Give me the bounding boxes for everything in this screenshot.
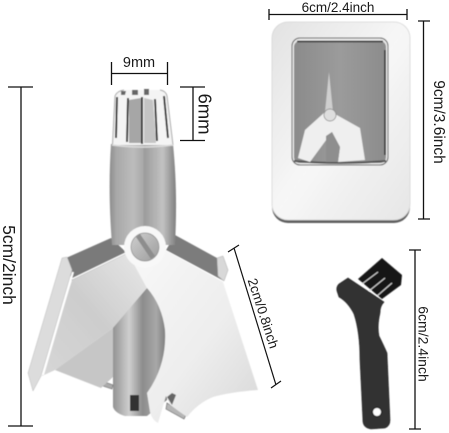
handle	[337, 278, 390, 429]
handle hole	[372, 408, 382, 416]
dimension: 6mm: 6mm	[194, 93, 216, 135]
dimension: 6cm/2.4inch side: 6cm/2.4inch	[416, 306, 432, 382]
upper shaft	[110, 144, 176, 245]
dimension: 6mm	[180, 87, 216, 140]
left blade	[42, 252, 147, 388]
right blade	[128, 250, 258, 423]
dimension: 6cm/2.4inch top: 6cm/2.4inch	[302, 0, 374, 15]
lower shaft	[113, 288, 167, 416]
dimension: 9mm: 9mm	[123, 55, 155, 71]
slot	[130, 395, 139, 411]
pivot ring	[124, 226, 166, 268]
dimension: 5cm/2inch	[0, 87, 33, 426]
nose trimmer	[28, 89, 258, 423]
pins	[102, 381, 186, 419]
dimension: 9mm	[112, 55, 168, 85]
storage tin	[272, 22, 410, 223]
dimension: 2cm/0.8inch: 2cm/0.8inch	[245, 276, 281, 350]
cutter head	[112, 89, 173, 147]
bristles	[358, 258, 402, 299]
tin window	[292, 38, 388, 165]
dimension: 2cm/0.8inch	[228, 245, 281, 388]
dimension: 9cm/3.6inch	[418, 21, 447, 219]
dimension: 9cm/3.6inch: 9cm/3.6inch	[430, 80, 447, 164]
cleaning brush	[337, 258, 402, 429]
left fold	[28, 257, 72, 391]
screw	[131, 233, 159, 261]
rear wings	[66, 235, 224, 281]
dimension: 6cm/2.4inch top	[269, 0, 407, 20]
dimension: 6cm/2.4inch side	[409, 250, 432, 429]
mini trimmer in window	[298, 72, 365, 162]
